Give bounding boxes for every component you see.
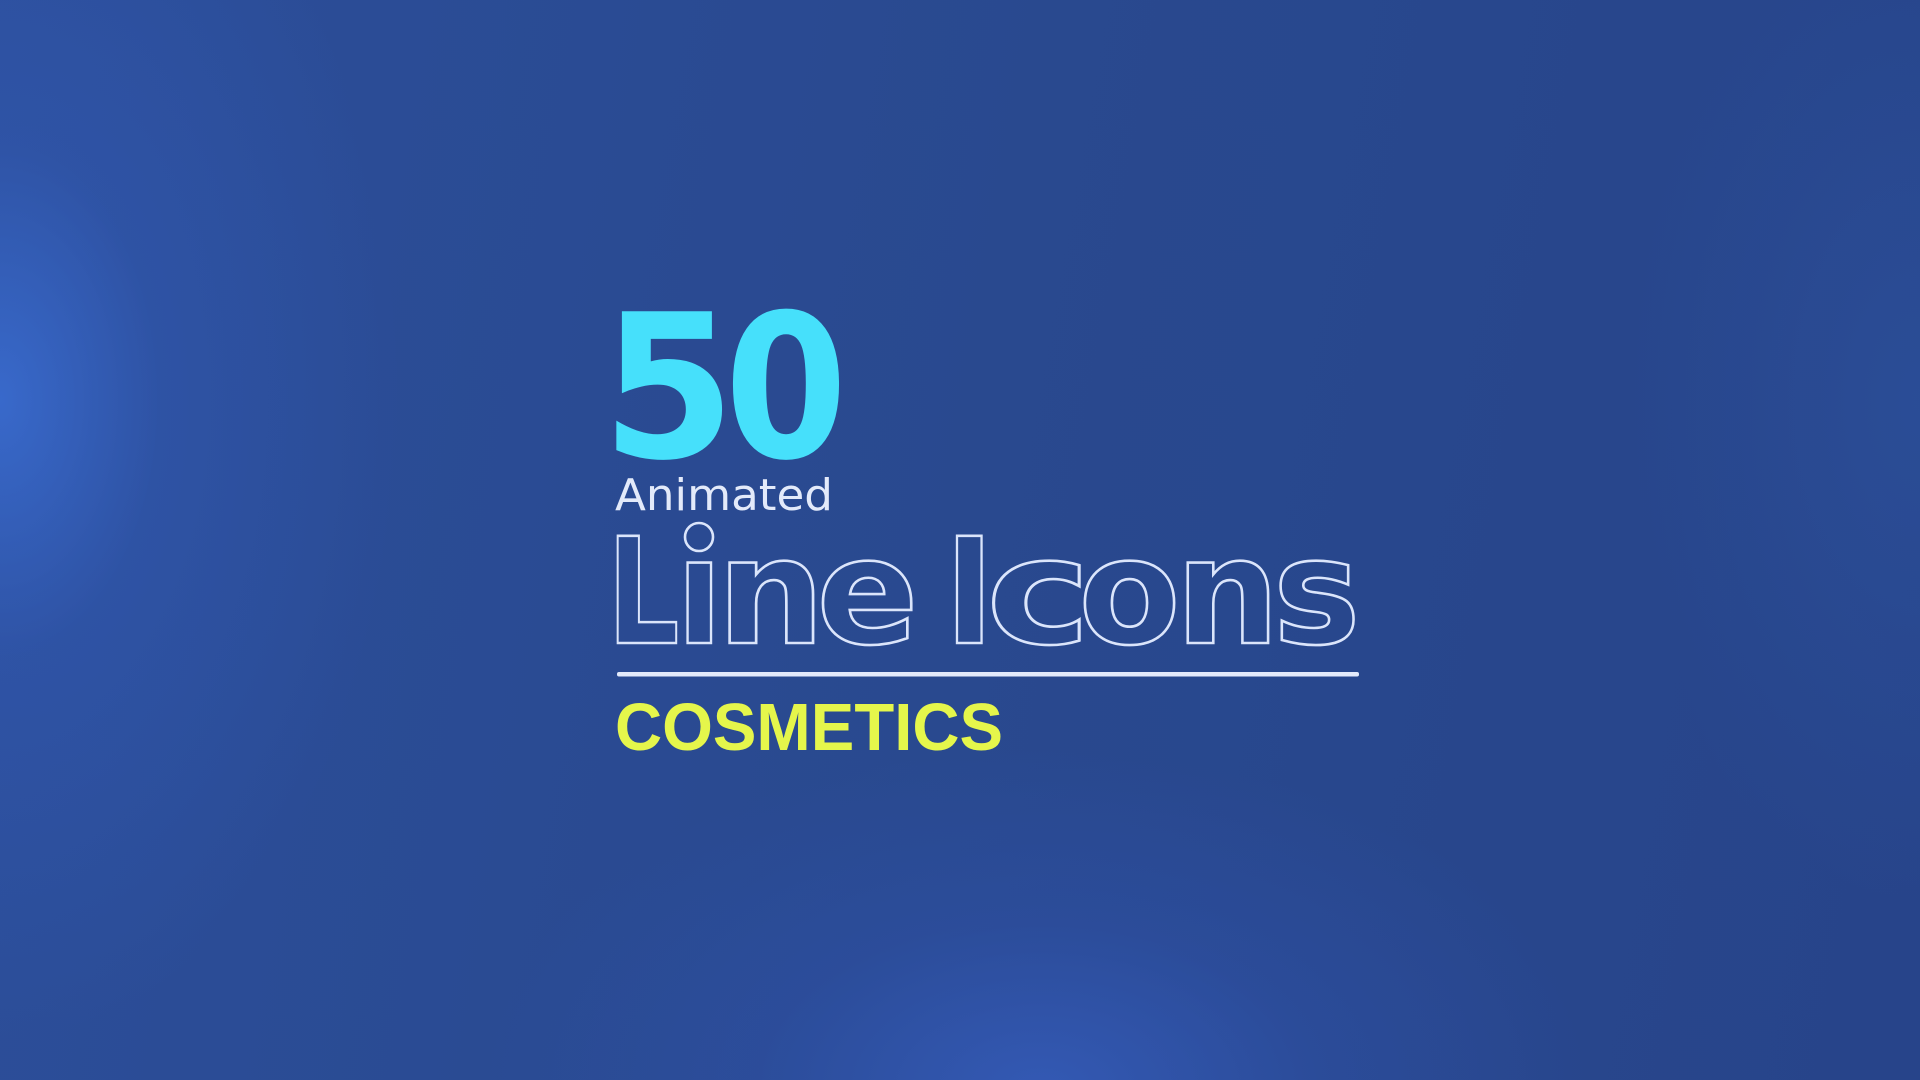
text: Animated: Animated — [615, 470, 833, 521]
underline rule — [617, 672, 1359, 676]
subheading: COSMETICS: COSMETICS — [615, 690, 1003, 765]
outlined heading: Line Icons: e — [816, 507, 918, 678]
number 50: 5 — [602, 272, 736, 505]
number 50: 0 — [724, 272, 848, 505]
outlined heading: Line Icons: c — [986, 507, 1091, 678]
outlined heading: Line Icons: i — [676, 507, 722, 678]
outlined heading: Line Icons: n — [1176, 507, 1280, 678]
title lockup — [615, 308, 1359, 750]
outlined heading: Line Icons: I — [945, 507, 994, 678]
outlined heading: Line Icons: n — [717, 507, 825, 678]
outlined heading: Line Icons: L — [607, 507, 679, 678]
outlined heading: Line Icons: o — [1078, 507, 1180, 678]
outlined heading: Line Icons: s — [1273, 507, 1360, 678]
outlined heading: Line Icons — [616, 522, 1355, 646]
